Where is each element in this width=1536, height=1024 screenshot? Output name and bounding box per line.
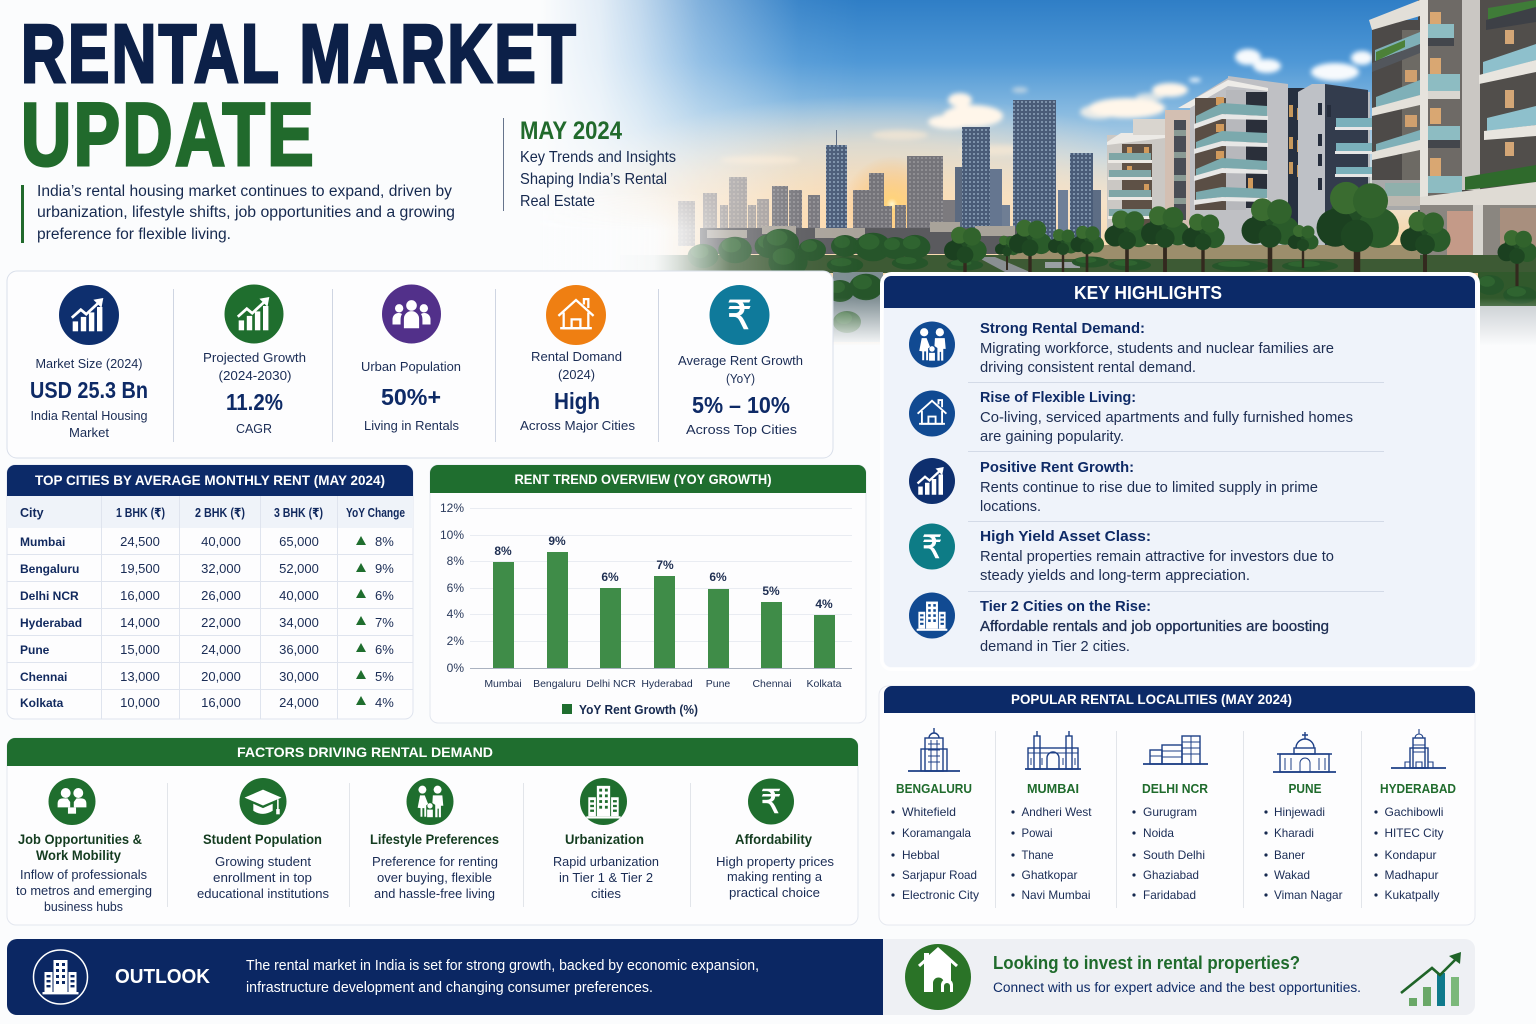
factor: job opportunities: [16, 778, 152, 914]
city labels: Bengaluru: [533, 678, 581, 690]
table title bar: TOP CITIES BY AVERAGE MONTHLY RENT (MAY 2024): [35, 472, 385, 488]
city: Pune: Viman Nagar: [1274, 888, 1342, 902]
table header row: [7, 496, 413, 528]
mid-rise block C: [1288, 84, 1373, 250]
KPI: urban population: 50%+: [381, 384, 441, 410]
y axis and grid: 8%: [447, 554, 464, 568]
low-rise city base: [700, 222, 1030, 254]
KPI: projected growth: CAGR: [236, 421, 272, 436]
main towers: [826, 100, 1101, 250]
highlight: high yield: ₹: [922, 529, 942, 565]
table rows: 5%: [375, 669, 394, 684]
table rows: 14,000: [120, 615, 160, 630]
highlight: rent growth: Positive Rent Growth:: [980, 459, 1134, 476]
y axis and grid: [440, 501, 852, 675]
mid-rise block A: [1107, 119, 1165, 240]
city: Mumbai: MUMBAI: [1027, 781, 1079, 796]
table rows: 20,000: [201, 669, 241, 684]
table header row: 2 BHK (₹): [195, 506, 245, 520]
factor: urbanization: in Tier 1 & Tier 2: [559, 870, 653, 885]
chart title bar: [430, 465, 866, 493]
city: Bengaluru: Electronic City: [902, 888, 979, 902]
y axis and grid: 2%: [447, 634, 464, 648]
highlight: strong rental demand: [909, 320, 1334, 376]
city: Delhi NCR: Noida: [1143, 826, 1174, 840]
localities title bar: [884, 686, 1475, 713]
highlight: tier 2 cities: demand in Tier 2 cities.: [980, 639, 1130, 655]
intro text: [21, 183, 455, 243]
city: Delhi NCR: South Delhi: [1143, 848, 1205, 862]
city: Mumbai: Andheri West: [1022, 805, 1092, 819]
table rows: 7%: [375, 615, 394, 630]
highlight: high yield: High Yield Asset Class:: [980, 528, 1151, 545]
central column and bay: [1420, 0, 1428, 275]
date block: Shaping India’s Rental: [520, 171, 667, 188]
panel: outlook: infrastructure development and changing consumer preferences.: [246, 980, 653, 996]
factor: student population: [197, 778, 330, 901]
left balconies: [1375, 32, 1420, 153]
KPI: market size: [30, 285, 148, 440]
city labels: Kolkata: [806, 678, 842, 690]
city: Pune: Hinjewadi: [1274, 805, 1325, 819]
panel: call to action: Connect with us for expert advice and the best opportunities.: [993, 980, 1361, 995]
key highlights title bar: [884, 276, 1475, 308]
factors title bar: FACTORS DRIVING RENTAL DEMAND: [237, 744, 493, 760]
table rows: 52,000: [279, 561, 319, 576]
trees and bushes: [688, 182, 1536, 333]
table rows: 24,000: [201, 642, 241, 657]
table rows: 6%: [375, 642, 394, 657]
factor: job opportunities: Job Opportunities &: [18, 832, 142, 847]
factor: student population: Growing student: [215, 854, 311, 869]
KPI: rental demand: [520, 285, 636, 433]
KPI: projected growth: (2024-2030): [218, 368, 292, 383]
hero photo: city skyline at sunset: [560, 0, 1536, 342]
KPI: urban population: Living in Rentals: [364, 418, 459, 433]
factor: affordability: making renting a: [727, 869, 823, 884]
city: Hyderabad: [1374, 729, 1456, 902]
y axis and grid: 4%: [447, 607, 464, 621]
factors title bar: [7, 738, 858, 766]
city: Delhi NCR: Faridabad: [1143, 888, 1196, 902]
date block: Real Estate: [520, 193, 595, 210]
KPI: rental demand: Rental Domand: [531, 349, 622, 364]
city: Delhi NCR: DELHI NCR: [1142, 781, 1209, 796]
table header row: 1 BHK (₹): [116, 506, 165, 520]
table rows: 8%: [375, 534, 394, 549]
intro text: preference for flexible living.: [37, 226, 231, 243]
panel: KPI cards: [7, 271, 833, 458]
city: Delhi NCR: [1132, 736, 1209, 902]
city: Bengaluru: Sarjapur Road: [902, 868, 977, 882]
date block: [503, 117, 676, 211]
icon: Bengaluru tower: [908, 728, 960, 771]
intro text: urbanization, lifestyle shifts, job opportunities and a growing: [37, 204, 455, 221]
icon: Pune domed hall: [1273, 732, 1336, 772]
table rows: Bengaluru: [20, 562, 79, 576]
city: Delhi NCR: Gurugram: [1143, 805, 1197, 819]
panel: rent trend chart: [430, 465, 866, 723]
panel: popular rental localities: [879, 686, 1475, 925]
bar values: 4%: [815, 597, 833, 611]
highlight: tier 2 cities: Affordable rentals and job opportunities are boosting: [980, 619, 1329, 635]
highlight: high yield: steady yields and long-term appreciation.: [980, 568, 1250, 584]
table header row: 3 BHK (₹): [274, 506, 323, 520]
panel: outlook: [7, 939, 883, 1015]
table rows: 16,000: [120, 588, 160, 603]
factor: affordability: practical choice: [729, 885, 820, 900]
KPI: rental demand: (2024): [558, 367, 595, 382]
distant towers: [678, 177, 769, 247]
factor: urbanization: cities: [591, 886, 621, 901]
factor: affordability: ₹: [760, 783, 782, 820]
bars: [493, 552, 835, 668]
chart title bar: RENT TREND OVERVIEW (YOY GROWTH): [514, 471, 772, 487]
table rows: Chennai: [20, 670, 67, 684]
highlight: high yield: [909, 524, 1334, 584]
highlight: strong rental demand: Strong Rental Demand:: [980, 320, 1145, 337]
city: Mumbai: Navi Mumbai: [1022, 888, 1090, 902]
table header row: YoY Change: [346, 506, 405, 520]
KPI: average rent growth: (YoY): [726, 371, 755, 386]
KPI: rental demand: Across Major Cities: [520, 418, 636, 433]
table rows: 13,000: [120, 669, 160, 684]
table rows: 9%: [375, 561, 394, 576]
table rows: 22,000: [201, 615, 241, 630]
table rows: 4%: [375, 695, 394, 710]
city: Pune: Kharadi: [1274, 826, 1314, 840]
table rows: [20, 534, 394, 710]
bar values: 5%: [762, 584, 780, 598]
table rows: Mumbai: [20, 535, 65, 549]
highlight: high yield: Rental properties remain attractive for investors due to: [980, 549, 1334, 565]
city: Hyderabad: HYDERABAD: [1380, 781, 1456, 796]
city: Hyderabad: Kondapur: [1384, 848, 1436, 862]
factor: student population: educational institutions: [197, 886, 330, 901]
highlight: flexible living: Co-living, serviced apartments and fully furnished homes: [980, 410, 1353, 426]
table title bar: [7, 465, 413, 496]
city labels: [484, 678, 842, 690]
podium and ground floor: [1420, 182, 1536, 205]
factor: lifestyle preferences: Lifestyle Preferences: [370, 832, 499, 847]
panel: call to action: [883, 939, 1475, 1015]
KPI: market size: Market: [69, 425, 109, 440]
table rows: 40,000: [279, 588, 319, 603]
table rows: 6%: [375, 588, 394, 603]
KPI: projected growth: 11.2%: [226, 389, 283, 415]
table rows: Delhi NCR: [20, 589, 79, 603]
city: Mumbai: [1011, 731, 1092, 902]
clouds: [720, 49, 1373, 164]
title: RENTAL MARKET: [21, 7, 578, 100]
factor: student population: Student Population: [203, 832, 322, 847]
city: Pune: [1264, 732, 1342, 902]
KPI: average rent growth: [678, 285, 803, 437]
panel: outlook: OUTLOOK: [115, 966, 211, 988]
ground and greenery: [620, 245, 1536, 346]
highlight: strong rental demand: driving consistent rental demand.: [980, 360, 1196, 376]
city: Hyderabad: Madhapur: [1384, 868, 1438, 882]
city: Hyderabad: HITEC City: [1384, 826, 1444, 840]
highlight: rent growth: Rents continue to rise due to limited supply in prime: [980, 480, 1318, 496]
table rows: 32,000: [201, 561, 241, 576]
city: Mumbai: Powai: [1022, 826, 1052, 840]
foreground tower with balconies: [1369, 0, 1536, 275]
date block: MAY 2024: [520, 117, 622, 145]
factor: job opportunities: to metros and emerging: [16, 883, 152, 898]
panel: factors driving rental demand: [7, 738, 858, 925]
table rows: Kolkata: [20, 696, 64, 710]
y axis and grid: 6%: [447, 581, 464, 595]
localities title bar: POPULAR RENTAL LOCALITIES (MAY 2024): [1011, 692, 1292, 707]
highlight: rent growth: [909, 458, 1318, 515]
highlight: flexible living: are gaining popularity.: [980, 429, 1124, 445]
date block: Key Trends and Insights: [520, 149, 676, 166]
legend: YoY Rent Growth (%): [579, 703, 698, 717]
bar values: 6%: [601, 570, 619, 584]
icon: Hyderabad clock tower: [1391, 729, 1446, 768]
panel: outlook: The rental market in India is set for strong growth, backed by economic expansion,: [246, 958, 759, 974]
icon: Gateway of India: [1025, 731, 1081, 769]
city labels: Chennai: [752, 678, 792, 690]
city labels: Pune: [706, 678, 730, 690]
table rows: 40,000: [201, 534, 241, 549]
factor: lifestyle preferences: [370, 778, 499, 901]
city: Pune: Baner: [1274, 848, 1305, 862]
city: Bengaluru: BENGALURU: [896, 781, 972, 796]
table rows: 26,000: [201, 588, 241, 603]
factor: urbanization: Urbanization: [565, 832, 644, 847]
table rows: Pune: [20, 643, 50, 657]
right balconies: [1480, 0, 1536, 190]
city: Bengaluru: [891, 728, 979, 902]
table rows: Hyderabad: [20, 616, 82, 630]
table rows: 34,000: [279, 615, 319, 630]
table rows: 30,000: [279, 669, 319, 684]
factor: job opportunities: Work Mobility: [36, 848, 121, 863]
panel: call to action: Looking to invest in rental properties?: [993, 953, 1300, 973]
bar values: 6%: [709, 570, 727, 584]
city labels: Delhi NCR: [586, 678, 636, 690]
KPI: market size: Market Size (2024): [36, 356, 142, 371]
factor: urbanization: [553, 778, 659, 901]
y axis and grid: 12%: [440, 501, 464, 515]
city: Mumbai: Ghatkopar: [1022, 868, 1078, 882]
bar values: 8%: [494, 544, 512, 558]
factor: job opportunities: business hubs: [44, 899, 123, 914]
city labels: Hyderabad: [641, 678, 693, 690]
highlight: tier 2 cities: [909, 592, 1329, 655]
city: Delhi NCR: Ghaziabad: [1143, 868, 1199, 882]
highlight: rent growth: locations.: [980, 499, 1041, 515]
icon: outlook building: [34, 950, 88, 1004]
KPI: average rent growth: Average Rent Growth: [678, 353, 803, 368]
table rows: 15,000: [120, 642, 160, 657]
KPI: average rent growth: 5% – 10%: [692, 392, 790, 418]
title: [21, 7, 578, 184]
KPI: projected growth: Projected Growth: [203, 350, 306, 365]
table rows: 36,000: [279, 642, 319, 657]
KPI: average rent growth: Across Top Cities: [686, 422, 798, 437]
KPI: urban population: Urban Population: [361, 359, 461, 374]
KPI: projected growth: [203, 284, 306, 436]
title: UPDATE: [21, 84, 316, 184]
highlight: strong rental demand: Migrating workforce, students and nuclear families are: [980, 341, 1334, 357]
city: Hyderabad: Kukatpally: [1384, 888, 1440, 902]
factor: affordability: High property prices: [716, 854, 835, 869]
mid-rise block B: [1165, 76, 1288, 250]
intro text: India’s rental housing market continues to expand, driven by: [37, 183, 452, 200]
city: Bengaluru: Whitefield: [902, 805, 956, 819]
table rows: 24,000: [279, 695, 319, 710]
factor: urbanization: Rapid urbanization: [553, 854, 659, 869]
KPI: rental demand: High: [554, 388, 600, 414]
table rows: 10,000: [120, 695, 160, 710]
city: Bengaluru: Koramangala: [902, 826, 971, 840]
icon: green house: [905, 944, 971, 1010]
bar values: 9%: [548, 534, 566, 548]
icon: growth chart: [1401, 952, 1461, 1006]
table rows: 24,500: [120, 534, 160, 549]
panel: key highlights: [882, 274, 1478, 670]
key highlights title bar: KEY HIGHLIGHTS: [1074, 283, 1222, 303]
bar values: 7%: [656, 558, 674, 572]
table rows: 65,000: [279, 534, 319, 549]
factor: affordability: [716, 778, 835, 900]
highlight: flexible living: Rise of Flexible Living:: [980, 389, 1136, 406]
city: Pune: PUNE: [1288, 781, 1322, 796]
KPI: average rent growth: ₹: [727, 294, 752, 338]
highlight: flexible living: [909, 389, 1353, 445]
factor: lifestyle preferences: over buying, flexible: [377, 870, 492, 885]
table rows: 19,500: [120, 561, 160, 576]
city: Mumbai: Thane: [1022, 848, 1054, 862]
KPI: market size: India Rental Housing: [30, 408, 148, 423]
factor: job opportunities: Inflow of professionals: [20, 867, 147, 882]
factor: lifestyle preferences: and hassle-free living: [374, 886, 495, 901]
factor: lifestyle preferences: Preference for renting: [372, 854, 498, 869]
bar values: [494, 534, 833, 611]
city: Bengaluru: Hebbal: [902, 848, 940, 862]
panel: top cities table: [7, 465, 413, 719]
KPI: urban population: [361, 284, 461, 433]
y axis and grid: 0%: [447, 661, 464, 675]
KPI: market size: USD 25.3 Bn: [30, 377, 148, 403]
factor: affordability: Affordability: [735, 832, 812, 847]
table rows: 16,000: [201, 695, 241, 710]
city labels: Mumbai: [484, 678, 522, 690]
city: Pune: Wakad: [1274, 868, 1310, 882]
factor: student population: enrollment in top: [213, 870, 312, 885]
icon: Delhi office blocks: [1143, 736, 1208, 764]
table header row: City: [20, 506, 44, 520]
y axis and grid: 10%: [440, 528, 464, 542]
city: Hyderabad: Gachibowli: [1384, 805, 1444, 819]
highlight: tier 2 cities: Tier 2 Cities on the Rise:: [980, 598, 1151, 615]
